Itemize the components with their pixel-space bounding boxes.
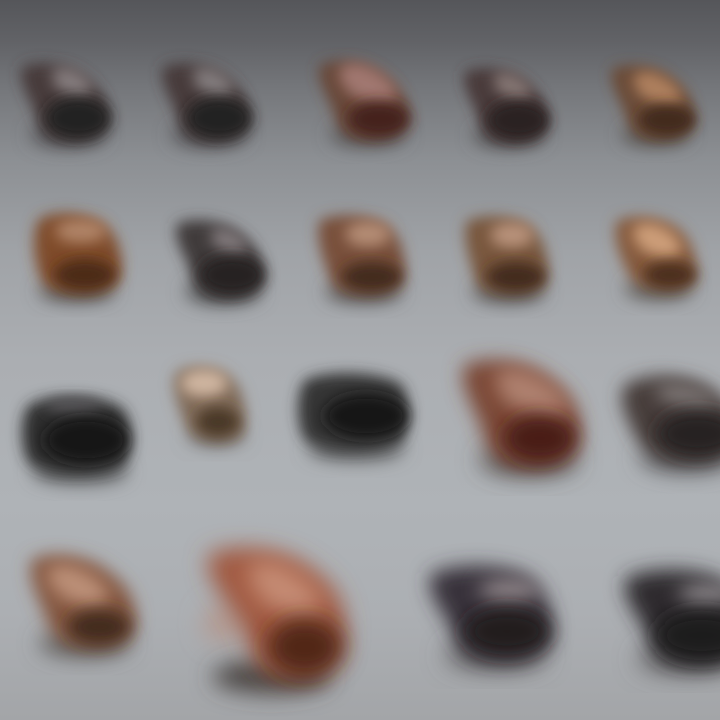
bean: brown r1c5 [611, 64, 696, 147]
row 1 of beans [21, 54, 696, 149]
bean: dark r4c4 [625, 570, 720, 673]
row 4 of beans [31, 548, 720, 693]
bean: brown r4c1 [31, 555, 136, 657]
bean: tan r3c2 [174, 367, 245, 446]
bean: red-brown r1c3 [319, 54, 410, 147]
bean: brown r2c4 [465, 216, 548, 303]
bean: dark r2c2 [176, 220, 265, 305]
bean: large red-brown r4c2 [202, 548, 345, 693]
bean: red-brown r3c4 [463, 357, 581, 475]
row 3 of beans [22, 357, 720, 484]
bean: black r3c3 [298, 373, 409, 461]
bean: orange r2c5 [615, 216, 697, 300]
bean: black r3c1 [22, 397, 132, 484]
bean: dark r1c2 [162, 61, 252, 148]
bean: brown r2c3 [318, 215, 405, 303]
bean: dark r3c5 [622, 376, 720, 472]
bean: orange-brown r2c1 [34, 213, 122, 302]
bean: dark r4c3 [430, 566, 552, 669]
row 2 of beans [34, 213, 697, 305]
bean: dark r1c4 [464, 66, 550, 149]
bean: dark r1c1 [21, 61, 111, 148]
